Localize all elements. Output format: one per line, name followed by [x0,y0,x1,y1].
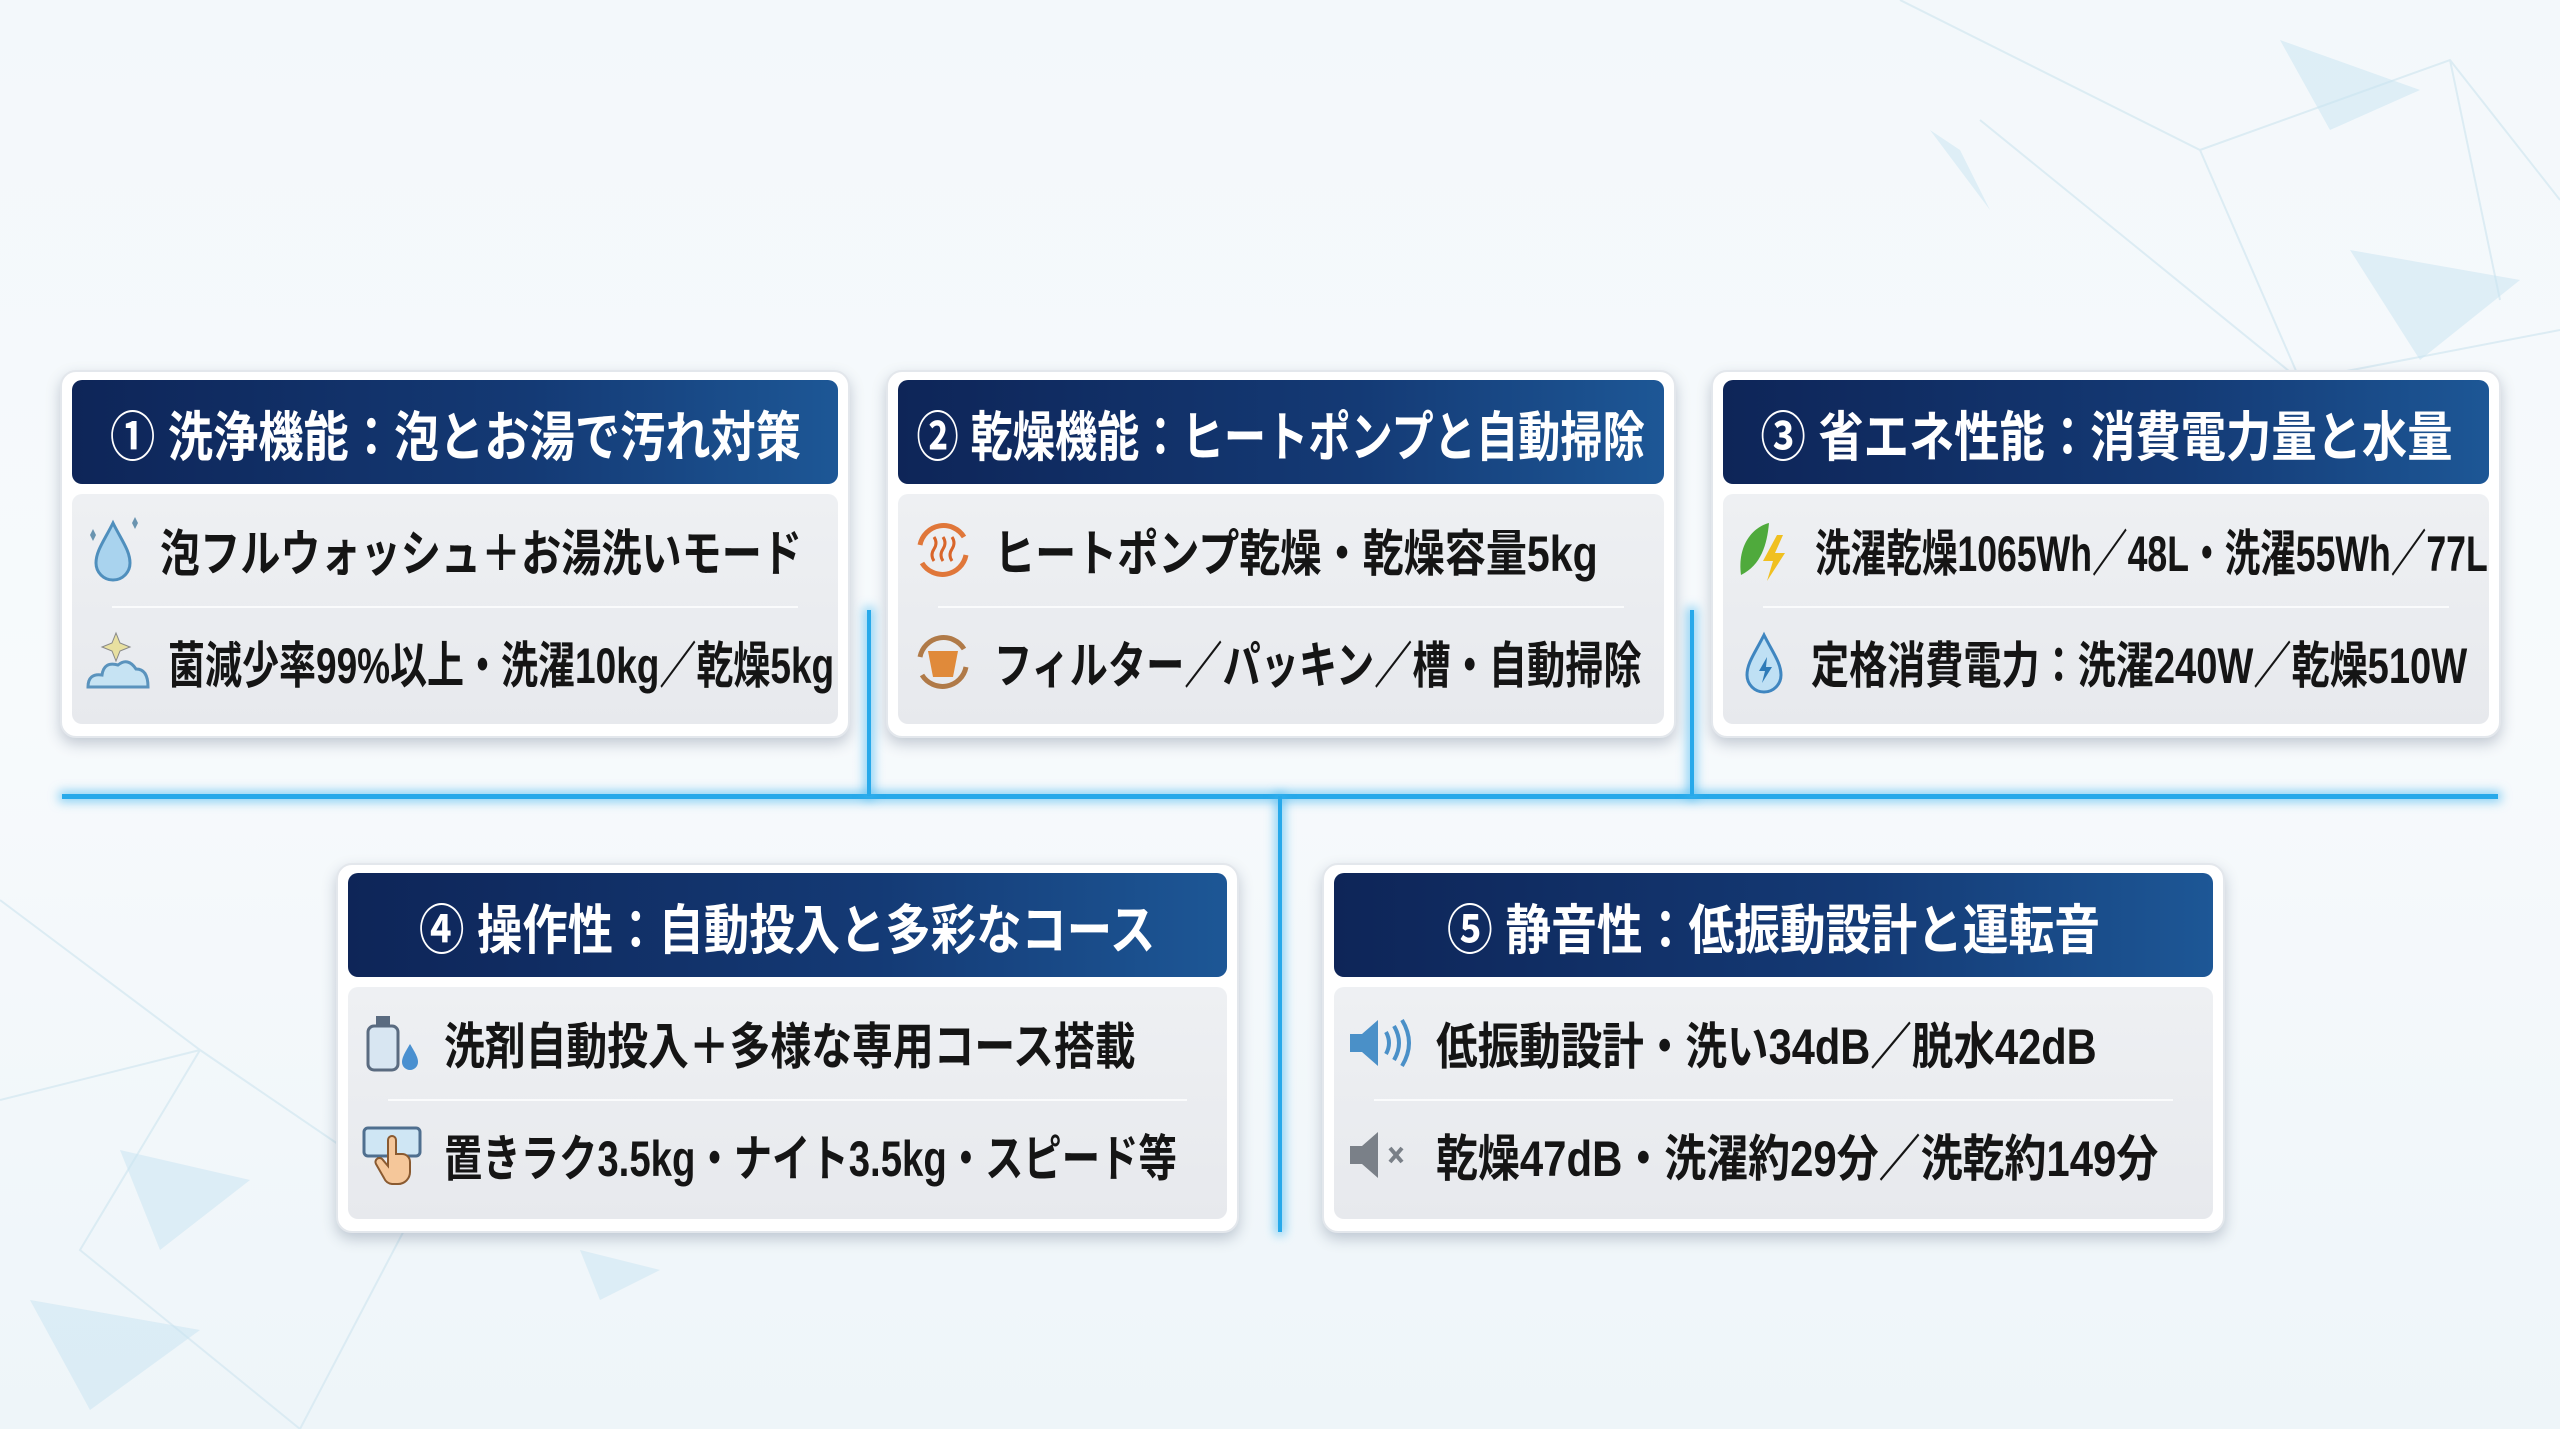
panel 3 [1711,370,2501,738]
row: energy use: 洗濯乾燥1065Wh／48L・洗濯55Wh／77L [1815,526,2488,582]
row: auto cleaning: フィルター／パッキン／槽・自動掃除 [994,638,1642,694]
header 1: ① 洗浄機能：泡とお湯で汚れ対策 [110,408,801,468]
row: rated power: 定格消費電力：洗濯240W／乾燥510W [1811,638,2467,694]
row: heat pump: ヒートポンプ乾燥・乾燥容量5kg [994,526,1598,582]
header 2 [898,380,1664,484]
row: courses: 置きラク3.5kg・ナイト3.5kg・スピード等 [444,1131,1177,1187]
header 3: ③ 省エネ性能：消費電力量と水量 [1760,408,2452,468]
connector lines [52,380,2508,1242]
header 5: ⑤ 静音性：低振動設計と運転音 [1447,900,2100,960]
row: auto dosing: 洗剤自動投入＋多様な専用コース搭載 [444,1019,1136,1075]
header 1 [72,380,838,484]
panel 4 [336,863,1239,1233]
row: foam wash: 泡フルウォッシュ＋お湯洗いモード [160,526,802,582]
header 4: ④ 操作性：自動投入と多彩なコース [419,900,1156,960]
panel 5 [1322,863,2225,1233]
row: sterilization: 菌減少率99%以上・洗濯10kg／乾燥5kg [168,638,834,694]
row: noise: 乾燥47dB・洗濯約29分／洗乾約149分 [1436,1131,2158,1187]
header 3 [1723,380,2489,484]
panel 2 [886,370,1676,738]
header 5 [1334,873,2213,977]
row: low vibration: 低振動設計・洗い34dB／脱水42dB [1436,1019,2097,1075]
panel 1 [60,370,850,738]
header 4 [348,873,1227,977]
header 2: ② 乾燥機能：ヒートポンプと自動掃除 [917,408,1645,468]
